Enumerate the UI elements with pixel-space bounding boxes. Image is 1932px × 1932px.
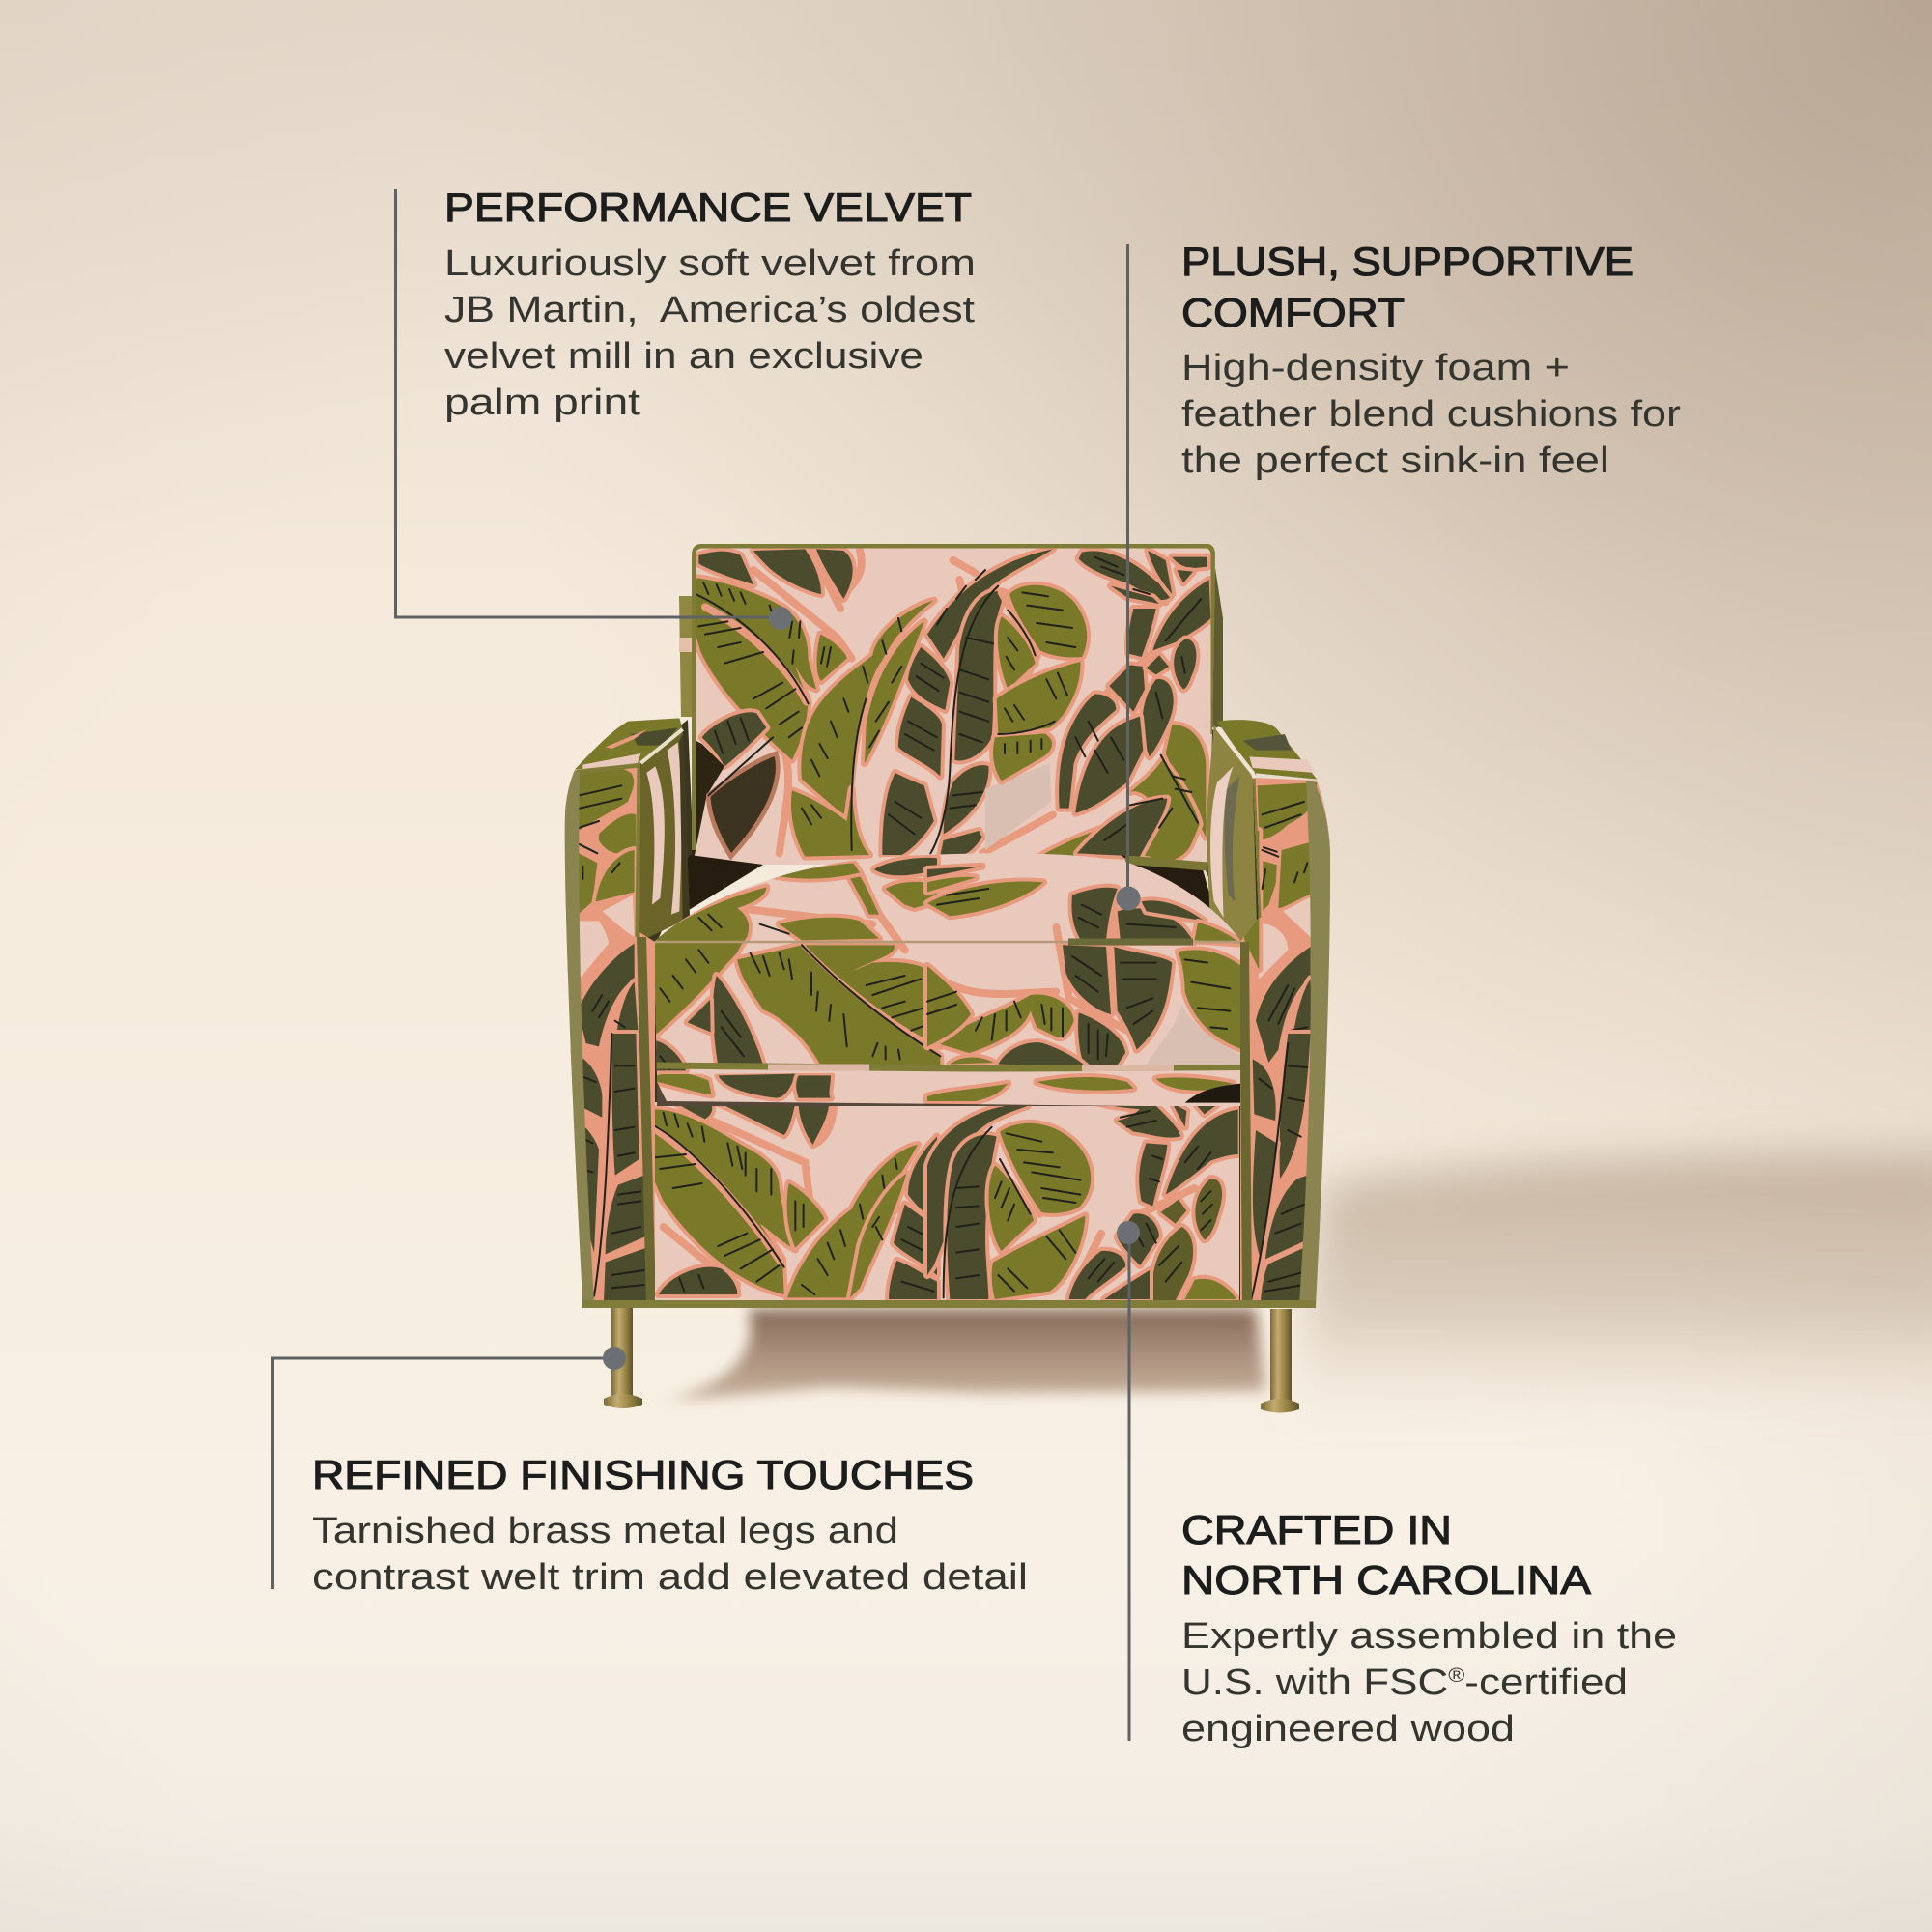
body text: Expertly assembled in the — [1181, 1616, 1677, 1657]
base right leaves — [927, 1103, 1238, 1301]
body text: engineered wood — [1181, 1709, 1515, 1749]
callout: performance velvet — [396, 185, 976, 630]
leader line — [1126, 244, 1129, 898]
callout: crafted in north carolina — [1117, 1221, 1677, 1749]
body text: Luxuriously soft velvet from — [444, 243, 976, 284]
heading: PLUSH, SUPPORTIVE — [1181, 239, 1634, 284]
chair — [560, 536, 1333, 1412]
marker dot — [603, 1347, 626, 1370]
back cushion — [676, 536, 1227, 869]
callout: plush comfort — [1117, 239, 1681, 910]
heading: COMFORT — [1181, 290, 1405, 335]
seat left leaves — [654, 858, 940, 1070]
leader line — [272, 1358, 614, 1589]
base left leaves — [650, 1103, 937, 1299]
callout: refined finishing touches — [272, 1347, 1028, 1598]
body text: High-density foam + — [1181, 348, 1570, 388]
body text: feather blend cushions for — [1181, 394, 1681, 435]
seat wells shadow — [642, 855, 1241, 947]
body text: ® — [1448, 1665, 1465, 1687]
body text — [312, 1511, 1028, 1598]
heading: PERFORMANCE VELVET — [444, 185, 972, 230]
back cushion left and centre leaves — [689, 549, 1053, 867]
base front panel — [647, 1096, 1246, 1309]
back side edges — [679, 555, 1223, 727]
left arm top and inner panel — [575, 718, 690, 944]
heading — [1181, 239, 1634, 335]
seat pocket lip — [657, 1070, 1240, 1106]
body text — [1181, 1616, 1677, 1749]
marker dot — [769, 607, 792, 630]
bottom welt — [582, 1300, 1316, 1308]
body text: palm print — [444, 383, 641, 423]
heading — [1181, 1507, 1591, 1603]
right leg — [1261, 1309, 1299, 1412]
floor shadow right of chair — [1294, 1153, 1932, 1415]
heading: REFINED FINISHING TOUCHES — [312, 1452, 974, 1497]
body text — [444, 243, 976, 423]
left leg — [604, 1304, 642, 1408]
floor shadow under chair — [667, 1309, 1265, 1401]
body text: JB Martin, America’s oldest — [444, 290, 976, 330]
marker dot — [1117, 887, 1140, 910]
leader line — [396, 189, 781, 617]
body text: contrast welt trim add elevated detail — [312, 1557, 1028, 1598]
heading: CRAFTED IN — [1181, 1507, 1452, 1552]
left arm front panel — [560, 758, 657, 1309]
body text: Tarnished brass metal legs and — [312, 1511, 898, 1551]
back cushion right leaves — [982, 551, 1210, 861]
marker dot — [1117, 1221, 1140, 1244]
body text: -certified — [1464, 1662, 1628, 1703]
right arm top and inner panel — [1206, 720, 1317, 950]
leader line — [1128, 1233, 1130, 1741]
heading: NORTH CAROLINA — [1181, 1557, 1591, 1603]
seat right leaves — [927, 867, 1243, 1070]
seat cushion — [647, 850, 1256, 1077]
right arm front panel — [1236, 773, 1333, 1314]
body text: U.S. with FSC — [1181, 1662, 1412, 1703]
body text: the perfect sink-in feel — [1181, 440, 1609, 481]
body text — [1181, 348, 1681, 481]
chair frame backing — [633, 720, 1261, 1302]
body text: velvet mill in an exclusive — [444, 336, 923, 377]
